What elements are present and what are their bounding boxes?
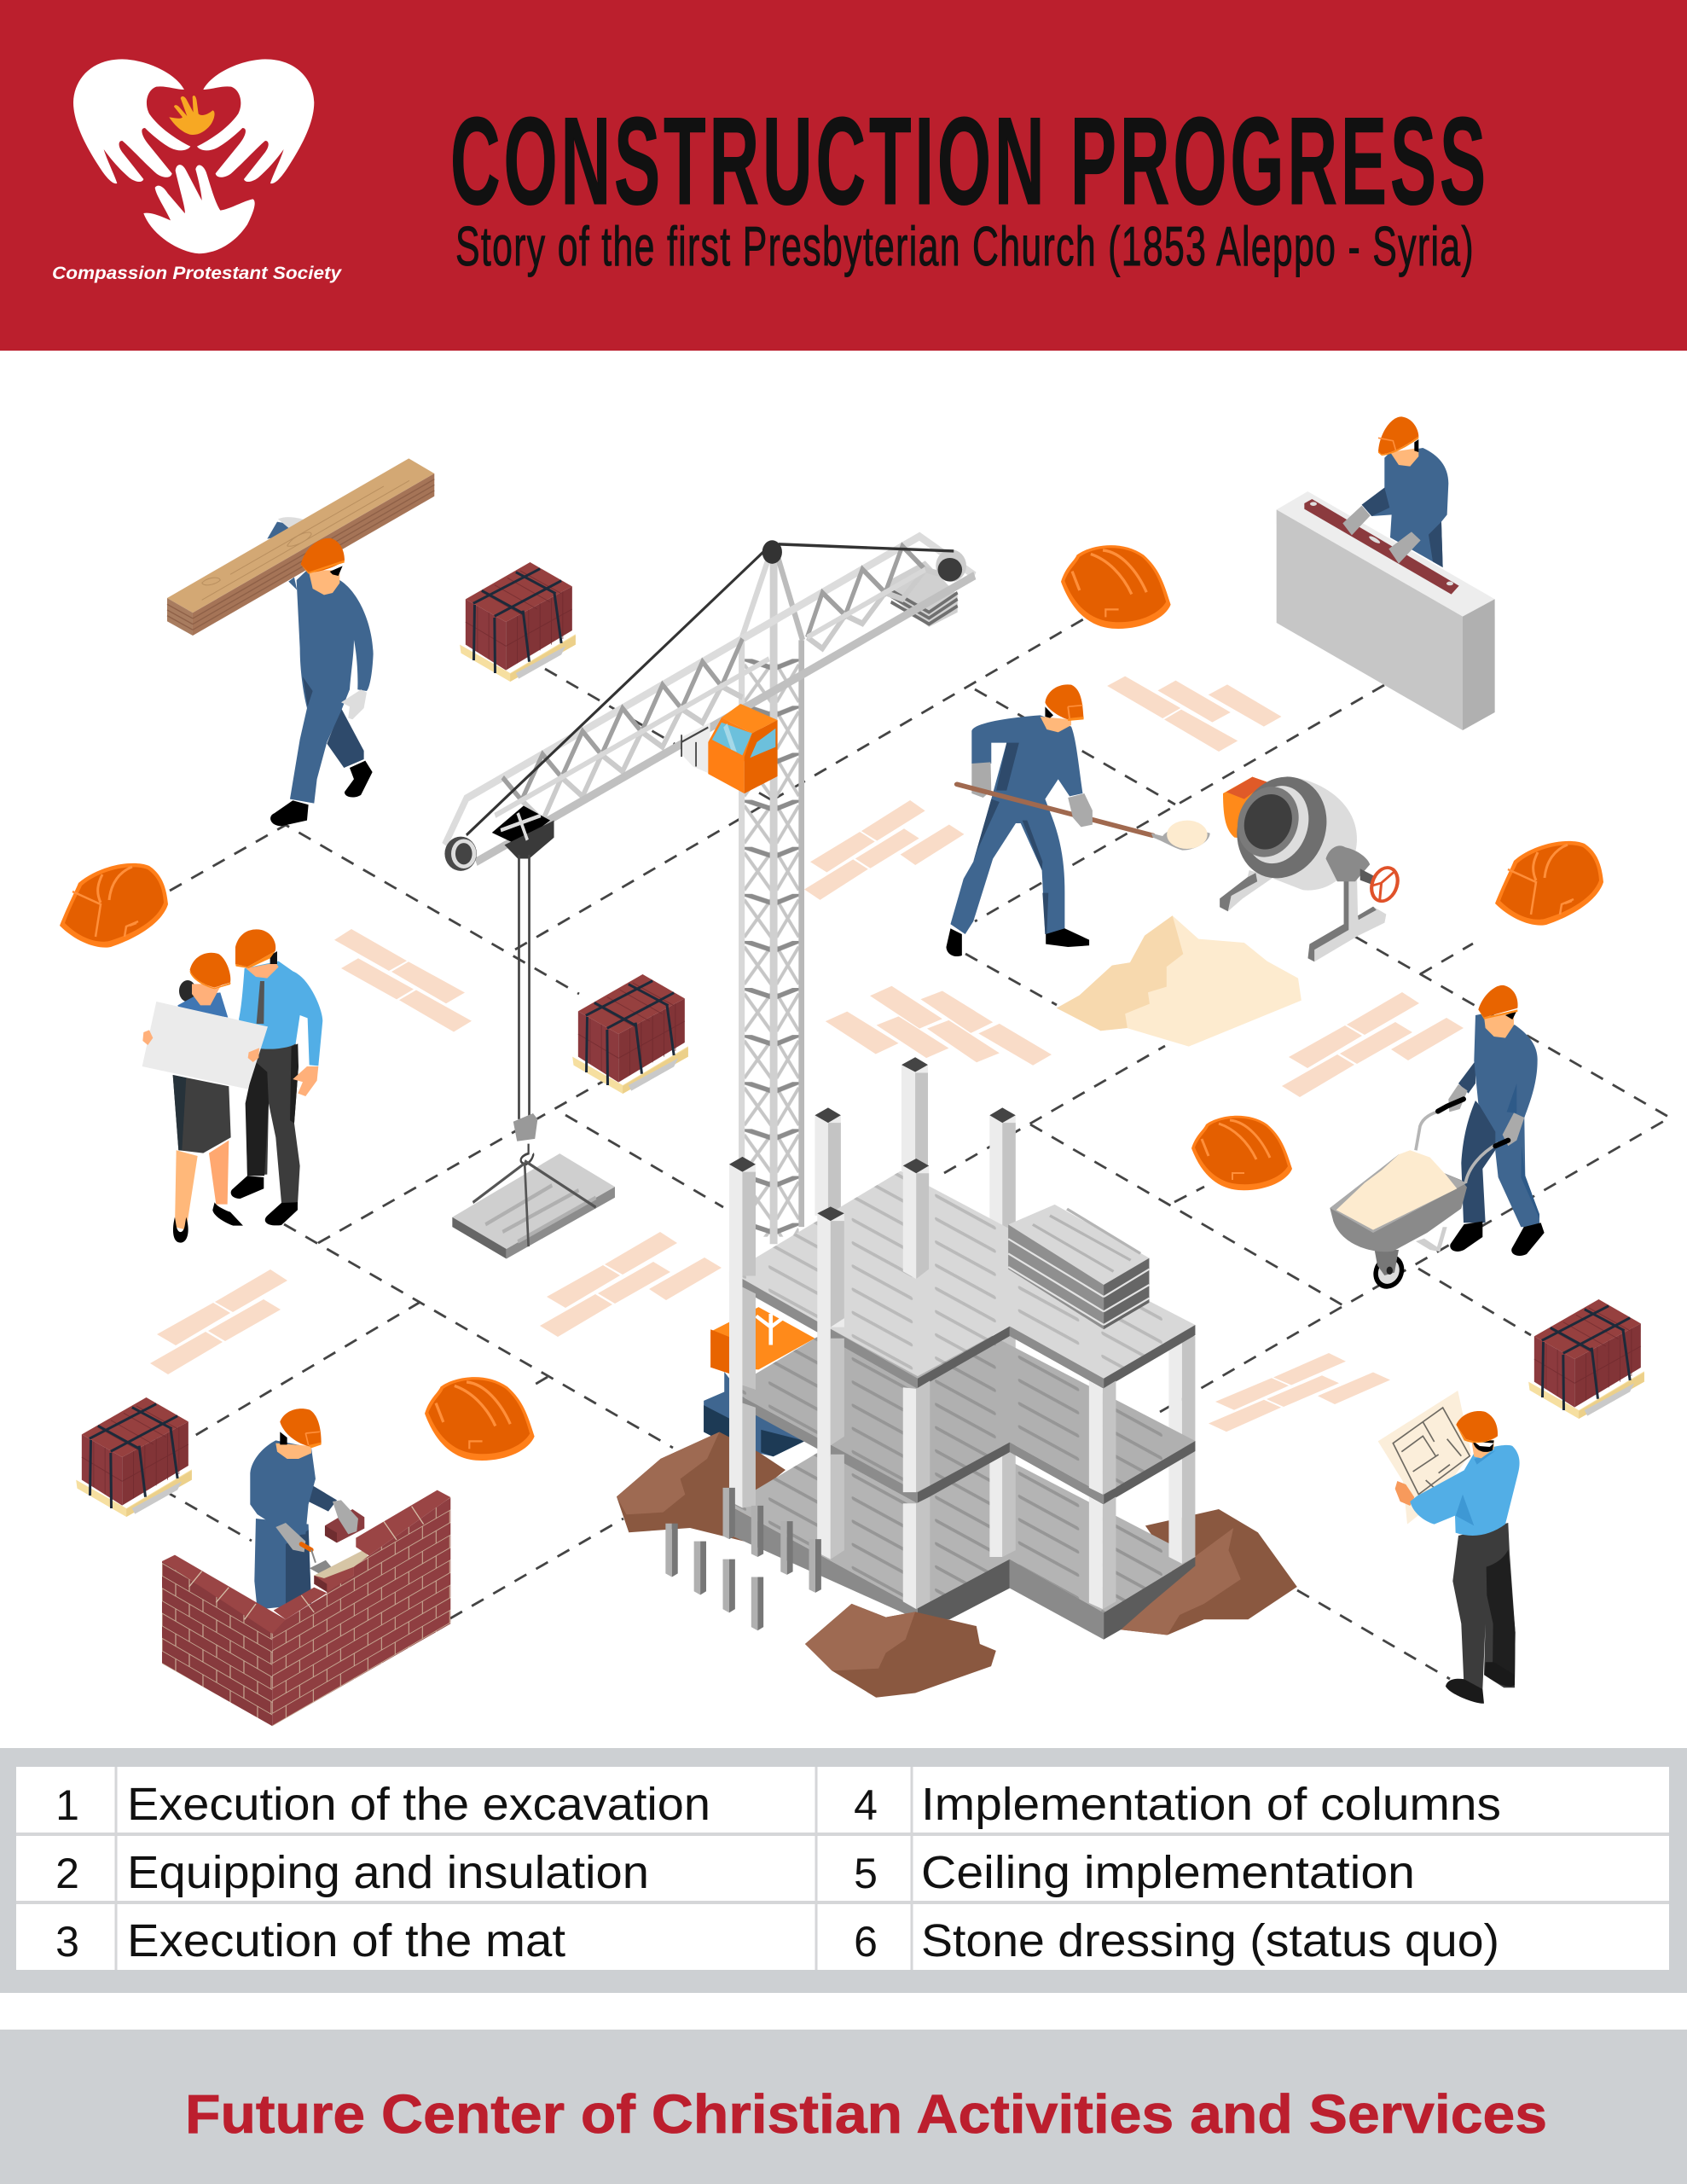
concrete block wall (1277, 491, 1495, 730)
worker levelling block wall (1277, 416, 1495, 730)
worker with shovel, concrete mixer and sand pile (946, 684, 1401, 1047)
foundation and ground floor (729, 1403, 1195, 1640)
brick wall (162, 1490, 450, 1726)
stack of precast slabs (1008, 1205, 1149, 1329)
sand pile (1057, 915, 1301, 1047)
step 1: Execution of the excavation (127, 1779, 710, 1830)
step 5: 5 (854, 1850, 878, 1897)
step 3: 3 (55, 1918, 79, 1966)
logo: compassion hands heart (73, 59, 314, 253)
hoist cables and hook (513, 855, 537, 1165)
rebar posts (665, 1488, 821, 1630)
concrete mixer (1220, 770, 1401, 961)
supervisors with plan: man and woman (142, 929, 322, 1243)
step 2: Equipping and insulation (127, 1847, 649, 1898)
helmet: centre (1191, 1116, 1292, 1190)
dashed isometric path lines (164, 619, 1670, 1679)
step 3: Execution of the mat (127, 1915, 565, 1966)
man (231, 929, 322, 1225)
step 2: 2 (55, 1850, 79, 1897)
crane operator cabin (681, 704, 778, 793)
excavator behind building (704, 1307, 815, 1456)
crane (444, 537, 975, 1259)
top floor (729, 1171, 1195, 1389)
step 6: 6 (854, 1918, 878, 1966)
worker shovelling (946, 684, 1210, 956)
middle floor (729, 1287, 1195, 1505)
brick pallet: lower left (76, 1397, 192, 1517)
woman (142, 953, 268, 1243)
footer text: Future Center of Christian Activities and Services (185, 2083, 1547, 2145)
brick pallet: under crane (572, 974, 688, 1094)
soil mounds (617, 1432, 1297, 1635)
helmet: right (1495, 841, 1603, 926)
worker reading blueprint (1378, 1391, 1520, 1704)
crane trolley (492, 805, 554, 858)
concrete building under construction (617, 1057, 1297, 1698)
bricklayer with wall (162, 1409, 450, 1726)
helmet: lower left (425, 1377, 535, 1461)
brick pallet: top (460, 562, 576, 682)
crane jib and counter-jib (444, 537, 975, 862)
header band (0, 0, 1687, 351)
helmet: top centre (1061, 545, 1171, 629)
worker carrying timber beam (167, 458, 434, 826)
wheelbarrow (1330, 1099, 1508, 1294)
helmet: left (60, 863, 168, 948)
back columns above top floor (815, 1057, 1016, 1229)
lower columns back (817, 1327, 1195, 1564)
step 1: 1 (55, 1781, 79, 1829)
bricklayer (250, 1409, 364, 1610)
front columns (729, 1157, 1116, 1609)
brick pallet: right (1528, 1299, 1644, 1419)
front soil mound (805, 1604, 996, 1698)
worker with wheelbarrow (1330, 985, 1545, 1294)
step 4: Implementation of columns (921, 1779, 1501, 1830)
crane cables (467, 544, 954, 835)
blueprint sheet (1378, 1391, 1471, 1525)
step 4: 4 (854, 1781, 878, 1829)
loose brick and trowel (301, 1500, 364, 1577)
footer band (0, 2030, 1687, 2184)
step 5: Ceiling implementation (921, 1847, 1415, 1898)
suspended floor slab (452, 1153, 615, 1259)
step 6: Stone dressing (status quo) (921, 1915, 1499, 1966)
brick floor patches (150, 677, 1464, 1432)
spirit level (1304, 499, 1459, 595)
steps table panel (0, 1748, 1687, 1993)
crane end pulleys (444, 540, 966, 871)
logo caption: Compassion Protestant Society (52, 264, 342, 283)
